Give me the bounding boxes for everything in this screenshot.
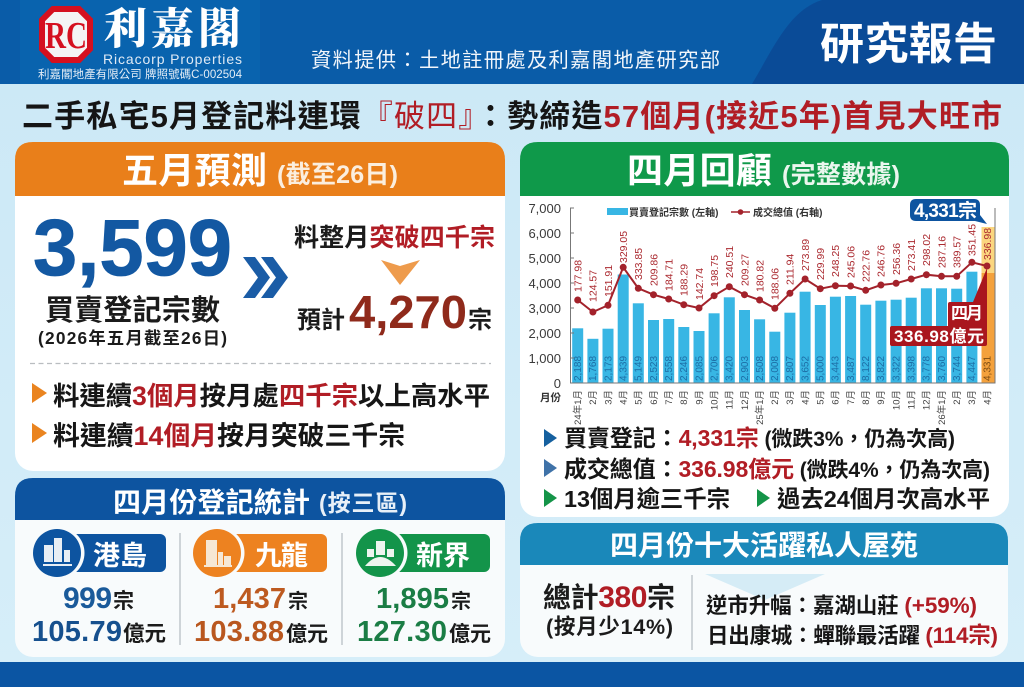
total 380 bbox=[543, 581, 675, 639]
data source line: 資料提供：土地註冊處及利嘉閣地產研究部 bbox=[311, 49, 720, 72]
bar value labels: 3,652 bbox=[800, 356, 811, 381]
line value labels: 336.98 bbox=[982, 228, 994, 260]
bullet: total value: 成交總值：336.98億元 (微跌4%，仍為次高) bbox=[564, 456, 990, 482]
big number 3,599 bbox=[33, 203, 232, 348]
district: Hong Kong Island: 億元 bbox=[123, 622, 166, 646]
bar value labels: 3,443 bbox=[831, 356, 842, 381]
x axis labels: 12月 bbox=[922, 390, 933, 410]
panel header: April review: (完整數據) bbox=[782, 161, 900, 189]
x axis labels: 12月 bbox=[740, 390, 751, 410]
x axis labels: 24年1月 bbox=[572, 390, 584, 425]
line value labels: 177.98 bbox=[572, 260, 584, 292]
district: Kowloon bbox=[192, 527, 328, 648]
bar value labels: 2,188 bbox=[573, 356, 584, 381]
bar value labels: 3,822 bbox=[876, 356, 887, 381]
x axis labels: 4月 bbox=[618, 390, 630, 405]
line value labels: 188.06 bbox=[770, 268, 782, 300]
bar value labels: 1,768 bbox=[588, 356, 599, 381]
line value labels: 333.85 bbox=[633, 248, 645, 280]
panel header: April review bbox=[520, 142, 1009, 196]
bar value labels: 3,778 bbox=[922, 356, 933, 381]
district: New Territories: 宗 bbox=[451, 589, 471, 613]
line value labels: 287.16 bbox=[936, 236, 948, 268]
y axis labels: 6,000 bbox=[528, 226, 561, 241]
district: Kowloon: 1,437 bbox=[213, 583, 286, 615]
panel header: district stats: 四月份登記統計 bbox=[113, 487, 310, 518]
x axis title: 月份 bbox=[540, 391, 561, 404]
icon: island buildings bbox=[43, 538, 72, 566]
bar value labels: 3,487 bbox=[846, 356, 857, 381]
district: Kowloon: 103.88 bbox=[194, 616, 284, 648]
district: New Territories bbox=[356, 527, 491, 648]
line value labels: 389.57 bbox=[952, 236, 964, 268]
line value labels: 222.76 bbox=[860, 250, 872, 282]
district: New Territories: 億元 bbox=[449, 623, 491, 646]
x axis labels: 8月 bbox=[679, 390, 690, 405]
line value labels: 246.76 bbox=[876, 245, 888, 277]
y axis labels: 1,000 bbox=[528, 351, 561, 366]
line value labels bbox=[572, 224, 994, 302]
district: Hong Kong Island: 宗 bbox=[113, 589, 134, 613]
bar value labels: 2,523 bbox=[649, 356, 660, 381]
district: New Territories: 127.30 bbox=[357, 616, 447, 648]
x axis labels: 11月 bbox=[906, 390, 918, 409]
icon: double chevron bbox=[243, 257, 288, 298]
logo: Ricacorp: Ricacorp Properties bbox=[103, 51, 242, 67]
line value labels: 273.41 bbox=[906, 239, 918, 271]
panel header: district stats: (按三區) bbox=[319, 490, 407, 516]
bar value labels: 2,706 bbox=[709, 356, 720, 381]
line value labels: 198.75 bbox=[709, 255, 721, 287]
panel header: top ten estates bbox=[520, 523, 1008, 565]
bar value labels: 8,122 bbox=[861, 356, 872, 381]
x axis labels: 4月 bbox=[982, 390, 993, 405]
line value labels: 329.05 bbox=[618, 231, 630, 263]
line value labels: 124.57 bbox=[588, 270, 600, 302]
bar value labels: 2,246 bbox=[679, 356, 690, 381]
bar value labels: 3,744 bbox=[952, 356, 963, 381]
x axis labels: 6月 bbox=[649, 390, 660, 405]
logo: Ricacorp: 利嘉閣地產有限公司 牌照號碼C-002504 bbox=[38, 67, 243, 81]
total 380: (按月少14%) bbox=[546, 615, 673, 639]
bullet: 24 month high: 過去24個月次高水平 bbox=[777, 486, 990, 512]
x axis labels: 4月 bbox=[800, 390, 811, 405]
line value labels: 211.94 bbox=[785, 254, 797, 285]
bar value labels: 3,322 bbox=[891, 356, 902, 381]
forecast: over 4000: 料整月突破四千宗 bbox=[294, 223, 495, 252]
line value labels: 184.71 bbox=[664, 259, 676, 291]
district: Hong Kong Island bbox=[32, 527, 166, 648]
line value labels: 245.06 bbox=[845, 246, 857, 278]
x axis labels: 26年1月 bbox=[936, 390, 948, 425]
line value labels: 209.86 bbox=[648, 254, 660, 286]
bar value labels: 4,447 bbox=[967, 356, 978, 381]
icon: village houses bbox=[365, 541, 396, 566]
line value labels: 180.82 bbox=[754, 260, 766, 292]
district: New Territories: 新界 bbox=[416, 541, 470, 571]
big number 3,599: (2026年五月截至26日) bbox=[38, 328, 227, 348]
panel: April district stats bbox=[15, 478, 505, 657]
big number 3,599: 買賣登記宗數 bbox=[45, 294, 220, 327]
x axis labels: 2月 bbox=[952, 390, 963, 405]
estate: LOHAS Park: 日出康城：蟬聯最活躍 (114宗) bbox=[707, 623, 998, 648]
callout: 4,331 registrations bbox=[910, 199, 987, 224]
x axis labels: 3月 bbox=[603, 390, 614, 405]
axes bbox=[570, 208, 995, 383]
big number 3,599: 3,599 bbox=[33, 203, 232, 292]
x axis labels: 8月 bbox=[861, 390, 872, 405]
panel header: district stats bbox=[15, 478, 505, 520]
x axis labels bbox=[572, 390, 993, 425]
panel: top ten estates bbox=[520, 523, 1008, 657]
district: Kowloon: 九龍 bbox=[255, 541, 308, 571]
bar value labels: 4,339 bbox=[618, 356, 630, 381]
x axis labels: 7月 bbox=[664, 390, 675, 405]
line value labels: 351.45 bbox=[967, 224, 979, 256]
line value labels: 151.91 bbox=[603, 265, 615, 297]
callout: April value: 四月 bbox=[951, 304, 983, 323]
report label: 研究報告 bbox=[820, 8, 997, 72]
bullet: registrations: 買賣登記：4,331宗 (微跌3%，仍為次高) bbox=[564, 425, 955, 451]
chart legend: 成交總值 (右軸) bbox=[753, 206, 822, 219]
district: Hong Kong Island: 港島 bbox=[93, 541, 147, 571]
line: transaction value bbox=[574, 259, 990, 316]
y axis labels: 3,000 bbox=[528, 301, 561, 316]
bars: registrations bbox=[572, 272, 977, 383]
bar value labels: 5,000 bbox=[816, 356, 827, 381]
panel header: top ten estates: 四月份十大活躍私人屋苑 bbox=[610, 530, 918, 561]
forecast 4,270: 宗 bbox=[468, 307, 492, 334]
y axis labels: 2,000 bbox=[528, 326, 561, 341]
panel header: May forecast: 五月預測 bbox=[122, 150, 267, 191]
x axis labels: 5月 bbox=[816, 390, 827, 405]
bar value labels: 2,807 bbox=[785, 356, 796, 381]
logo: Ricacorp: RC bbox=[45, 15, 87, 57]
chart legend bbox=[607, 206, 822, 219]
bar value labels: 2,008 bbox=[770, 356, 781, 381]
y axis labels: 4,000 bbox=[528, 276, 561, 291]
x axis labels: 2月 bbox=[770, 390, 781, 405]
panel header: April review: 四月回顧 bbox=[627, 150, 772, 191]
callout: 4,331 registrations: 4,331宗 bbox=[914, 199, 977, 222]
line value labels: 229.99 bbox=[815, 248, 827, 280]
forecast 4,270: 4,270 bbox=[349, 286, 467, 338]
callout: April value: 336.98億元 bbox=[894, 326, 984, 346]
x axis labels: 6月 bbox=[831, 390, 842, 405]
line value labels: 298.02 bbox=[921, 234, 933, 266]
x axis labels: 5月 bbox=[634, 390, 645, 405]
bar value labels bbox=[573, 356, 993, 381]
y axis labels bbox=[528, 201, 561, 391]
chart legend: 買賣登記宗數 (左軸) bbox=[629, 206, 718, 219]
district: Kowloon: 宗 bbox=[288, 589, 308, 613]
x axis labels: 2月 bbox=[588, 390, 599, 405]
bar value labels: 4,331 bbox=[982, 356, 993, 381]
bullet: 14 months: 料連續14個月按月突破三千宗 bbox=[53, 421, 405, 451]
bar value labels: 2,173 bbox=[603, 356, 614, 381]
bar value labels: 3,398 bbox=[906, 356, 918, 381]
x axis labels: 9月 bbox=[694, 390, 705, 405]
bar value labels: 2,085 bbox=[694, 356, 705, 381]
line value labels: 248.25 bbox=[830, 245, 842, 277]
x axis labels: 3月 bbox=[967, 390, 978, 405]
x axis labels: 9月 bbox=[876, 390, 887, 405]
bullet: 3 months: 料連續3個月按月處四千宗以上高水平 bbox=[53, 381, 490, 411]
footer band bbox=[0, 662, 1024, 687]
y axis labels: 5,000 bbox=[528, 251, 561, 266]
x axis labels: 3月 bbox=[785, 390, 796, 405]
bullet: 13 months: 13個月逾三千宗 bbox=[564, 485, 730, 512]
main title: 二手私宅5月登記料連環『破四』：勢締造57個月(接近5年)首見大旺市 bbox=[22, 99, 1002, 134]
bar value labels: 3,420 bbox=[725, 356, 736, 381]
line value labels: 273.89 bbox=[800, 239, 812, 271]
combo chart: registrations and value bbox=[528, 199, 995, 425]
line value labels: 188.29 bbox=[679, 264, 691, 296]
bar value labels: 3,760 bbox=[937, 356, 948, 381]
x axis labels: 10月 bbox=[709, 390, 720, 410]
y axis labels: 0 bbox=[554, 376, 561, 391]
estate: Kingswood Villas: 逆市升幅：嘉湖山莊 (+59%) bbox=[706, 593, 977, 618]
panel: April review bbox=[520, 142, 1009, 517]
y axis labels: 7,000 bbox=[528, 201, 561, 216]
panel: May forecast bbox=[15, 142, 505, 471]
icon: down arrow bbox=[381, 260, 420, 285]
district: New Territories: 1,895 bbox=[376, 583, 449, 615]
line value labels: 256.36 bbox=[891, 243, 903, 275]
line value labels: 240.51 bbox=[724, 246, 736, 278]
line value labels: 142.74 bbox=[694, 268, 706, 300]
x axis labels: 11月 bbox=[725, 390, 736, 409]
x axis labels: 25年1月 bbox=[754, 390, 766, 425]
district: Hong Kong Island: 105.79 bbox=[32, 616, 122, 648]
bar value labels: 2,903 bbox=[740, 356, 751, 381]
line value labels: 209.27 bbox=[739, 254, 751, 286]
logo: Ricacorp bbox=[38, 0, 243, 81]
callout: April value bbox=[890, 268, 987, 346]
header band bbox=[0, 0, 1024, 84]
bar value labels: 2,508 bbox=[755, 356, 766, 381]
total 380: 總計380宗 bbox=[543, 581, 675, 614]
icon: Kowloon towers bbox=[204, 540, 232, 567]
district: Hong Kong Island: 999 bbox=[63, 582, 112, 615]
forecast 4,270 bbox=[297, 286, 492, 338]
x axis labels: 7月 bbox=[846, 390, 857, 405]
highlight column: latest month bbox=[982, 227, 995, 383]
bar value labels: 2,558 bbox=[664, 356, 675, 381]
x axis labels: 10月 bbox=[891, 390, 902, 410]
panel header: May forecast bbox=[15, 142, 505, 196]
bar value labels: 5,149 bbox=[634, 356, 645, 381]
panel header: May forecast: (截至26日) bbox=[277, 161, 398, 189]
forecast 4,270: 預計 bbox=[297, 307, 345, 334]
district: Kowloon: 億元 bbox=[286, 623, 328, 646]
